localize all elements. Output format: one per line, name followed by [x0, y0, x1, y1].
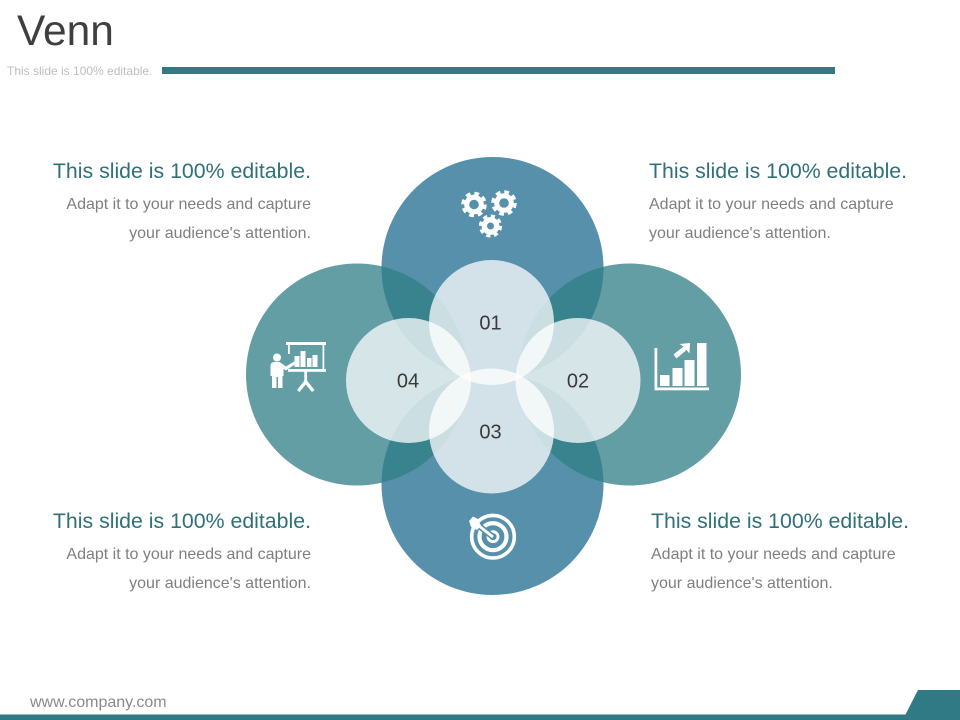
number 01: 01	[479, 312, 502, 334]
body copy	[66, 546, 311, 592]
heading: This slide is 100% editable.	[53, 509, 311, 533]
small circle 02	[516, 318, 640, 443]
text block: bottom right	[651, 509, 909, 592]
body copy: your audience's attention.	[649, 225, 831, 242]
body copy	[651, 546, 896, 592]
number 04: 04	[397, 370, 419, 392]
icon: growth bar chart	[654, 343, 709, 390]
body copy: Adapt it to your needs and capture	[649, 196, 894, 213]
title: Venn	[17, 8, 114, 55]
body copy: Adapt it to your needs and capture	[651, 546, 896, 563]
body copy: your audience's attention.	[129, 225, 311, 242]
subtitle: This slide is 100% editable.	[7, 64, 152, 78]
footer url: www.company.com	[30, 694, 167, 711]
body copy	[66, 196, 311, 242]
number 03: 03	[479, 422, 502, 444]
small circle 03	[429, 368, 554, 494]
footer bar	[0, 690, 960, 720]
text block: top left	[53, 159, 311, 242]
heading: This slide is 100% editable.	[649, 159, 907, 183]
venn diagram	[246, 157, 741, 595]
body copy	[649, 196, 894, 242]
title rule	[162, 67, 835, 74]
body copy: Adapt it to your needs and capture	[66, 546, 311, 563]
body copy: your audience's attention.	[651, 575, 833, 592]
icon: gears	[463, 192, 515, 236]
body copy: your audience's attention.	[129, 575, 311, 592]
circle: bottom	[382, 373, 604, 595]
circle: left	[246, 264, 468, 486]
circle: right	[519, 264, 741, 486]
number 02: 02	[567, 370, 589, 392]
icon: presenter at board	[270, 342, 326, 392]
heading: This slide is 100% editable.	[53, 159, 311, 183]
heading: This slide is 100% editable.	[651, 509, 909, 533]
small circle 04	[346, 318, 471, 443]
body copy: Adapt it to your needs and capture	[66, 196, 311, 213]
text block: top right	[649, 159, 907, 242]
small circle 01	[429, 260, 554, 385]
icon: target with dart	[469, 515, 514, 558]
overlaps of large circles	[382, 266, 604, 483]
circle: top	[382, 157, 604, 379]
text block: bottom left	[53, 509, 311, 592]
